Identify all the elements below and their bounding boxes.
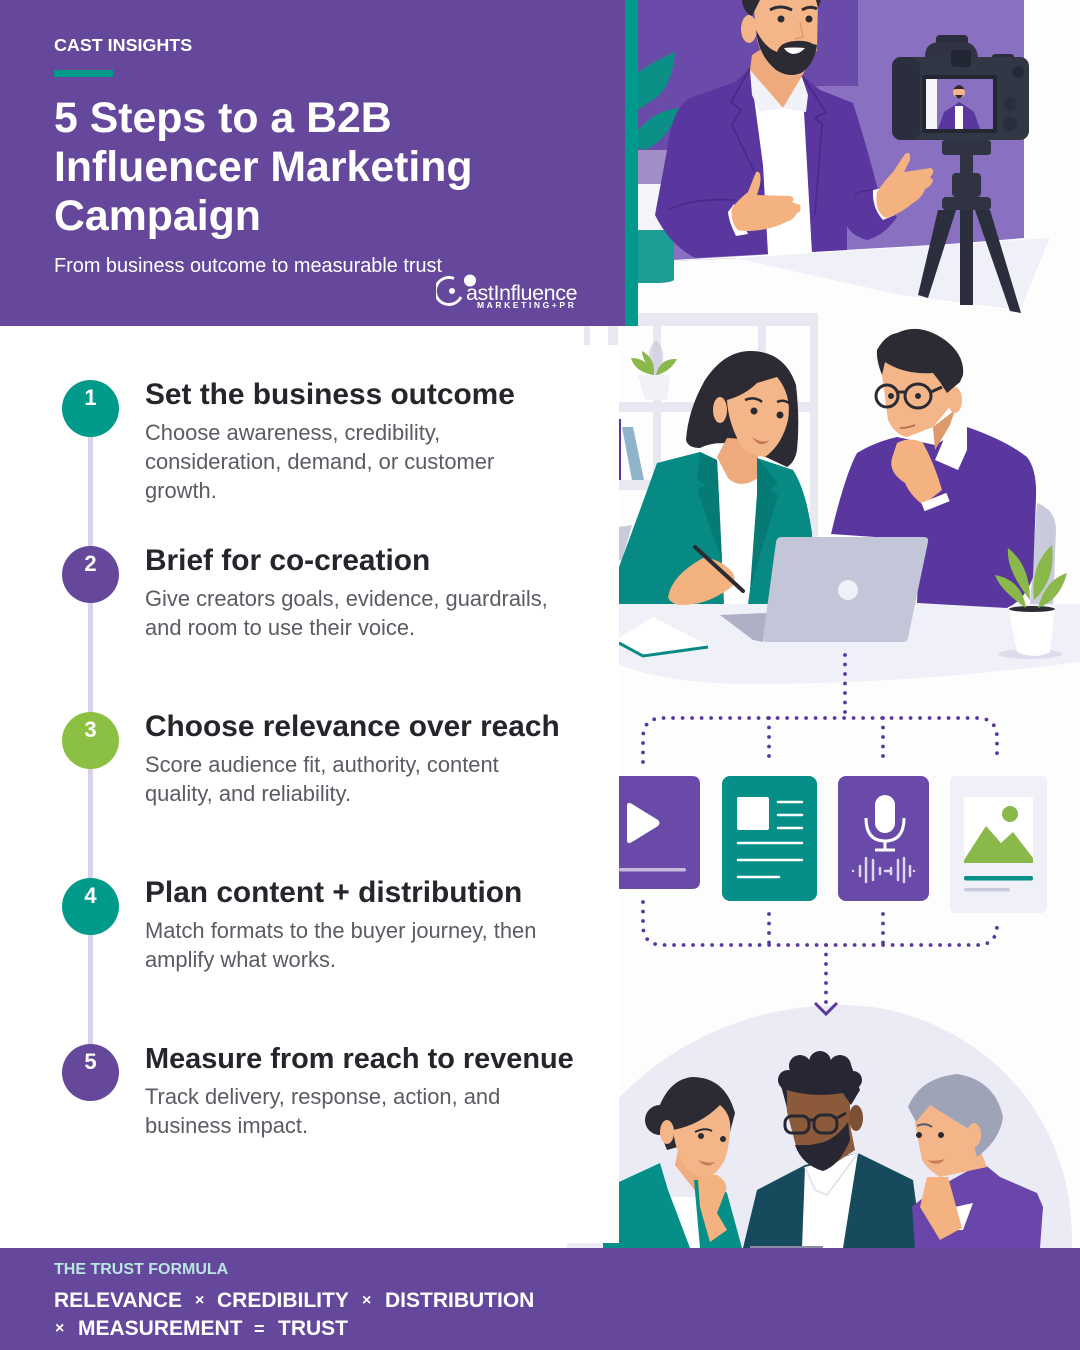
man in purple sweater xyxy=(831,329,1036,608)
left woman xyxy=(619,1077,742,1248)
step number 2: 2 xyxy=(84,551,97,576)
table xyxy=(619,604,1080,684)
formula line 2: = xyxy=(254,1319,265,1339)
plant leaves xyxy=(638,52,680,150)
teal pot xyxy=(638,230,674,283)
step 2 text: Give creators goals, evidence, guardrails, xyxy=(145,586,548,611)
scene: audience of three professionals xyxy=(619,1005,1072,1249)
step 1 text xyxy=(145,378,515,503)
step 4 text: amplify what works. xyxy=(145,947,336,972)
step 2 text: Brief for co-creation xyxy=(145,544,430,577)
right older woman xyxy=(908,1074,1043,1248)
header panel xyxy=(0,0,625,326)
scene: presenter filmed on camera xyxy=(638,0,1080,326)
subtitle: From business outcome to measurable trust xyxy=(54,255,442,277)
step 3 text: quality, and reliability. xyxy=(145,781,351,806)
camera screen xyxy=(926,79,993,129)
camera on tripod xyxy=(892,35,1029,313)
formula line 2 xyxy=(55,1317,348,1340)
formula line 2: TRUST xyxy=(278,1317,348,1340)
step 1 text: growth. xyxy=(145,478,217,503)
laptop xyxy=(720,537,928,642)
step 3 text xyxy=(145,710,560,806)
centre man xyxy=(743,1051,922,1249)
eyebrow: CAST INSIGHTS xyxy=(54,35,192,55)
logo: MARKETING+PR xyxy=(477,300,576,310)
step number 3: 3 xyxy=(84,717,97,742)
step number 4 xyxy=(62,878,119,935)
edge fragments xyxy=(567,326,619,1248)
shelf book xyxy=(622,427,644,480)
formula line 1: CREDIBILITY xyxy=(217,1289,349,1312)
shelf plant xyxy=(631,340,677,375)
step 4 text: Match formats to the buyer journey, then xyxy=(145,918,536,943)
arrow head xyxy=(815,1003,837,1014)
step number 3 xyxy=(62,712,119,769)
teal header edge xyxy=(625,0,638,326)
formula line 1 xyxy=(54,1289,534,1312)
flow connector: formats to audience xyxy=(643,902,997,1014)
step 4 text xyxy=(145,876,536,972)
flow connector: table to content formats xyxy=(643,655,997,762)
title: Campaign xyxy=(54,192,261,240)
step 5 text: Track delivery, response, action, and xyxy=(145,1084,500,1109)
notebook xyxy=(619,617,708,657)
scene: two colleagues at a laptop xyxy=(619,313,1080,684)
illustration column xyxy=(567,0,1080,1248)
card: image post xyxy=(950,776,1047,913)
step 5 text: Measure from reach to revenue xyxy=(145,1043,574,1075)
desk plant xyxy=(995,545,1067,659)
logo: astInfluence xyxy=(466,281,577,305)
accent bar xyxy=(54,70,113,77)
title: Influencer Marketing xyxy=(54,143,473,191)
formula line 2: × xyxy=(55,1320,64,1337)
timeline line xyxy=(88,408,93,1072)
step 1 text: Set the business outcome xyxy=(145,378,515,411)
step 4 text: Plan content + distribution xyxy=(145,876,522,909)
title: 5 Steps to a B2B xyxy=(54,94,392,142)
formula line 1: RELEVANCE xyxy=(54,1289,182,1312)
step 3 text: Choose relevance over reach xyxy=(145,710,560,743)
step 2 text: and room to use their voice. xyxy=(145,615,415,640)
step number 4: 4 xyxy=(84,883,97,908)
step number 1 xyxy=(62,380,119,437)
step 1 text: Choose awareness, credibility, xyxy=(145,420,440,445)
card: podcast xyxy=(838,776,929,901)
step 1 text: consideration, demand, or customer xyxy=(145,449,494,474)
logo xyxy=(436,274,577,310)
formula line 1: × xyxy=(362,1292,371,1309)
step number 5: 5 xyxy=(84,1049,97,1074)
step 5 text: business impact. xyxy=(145,1113,308,1138)
step 3 text: Score audience fit, authority, content xyxy=(145,752,499,777)
step number 1: 1 xyxy=(84,385,97,410)
step number 2 xyxy=(62,546,119,603)
footer label: THE TRUST FORMULA xyxy=(54,1261,228,1278)
step 5 text xyxy=(145,1043,574,1138)
formula line 2: MEASUREMENT xyxy=(78,1317,243,1340)
presenter xyxy=(655,0,933,258)
woman in teal xyxy=(619,351,812,605)
chair backs xyxy=(1030,503,1056,606)
step 2 text xyxy=(145,544,548,640)
formula line 1: DISTRIBUTION xyxy=(385,1289,534,1312)
footer formula band xyxy=(0,1248,1080,1350)
card: article xyxy=(722,776,817,901)
card: video xyxy=(619,776,700,889)
step number 5 xyxy=(62,1044,119,1101)
formula line 1: × xyxy=(195,1292,204,1309)
title xyxy=(54,94,473,240)
